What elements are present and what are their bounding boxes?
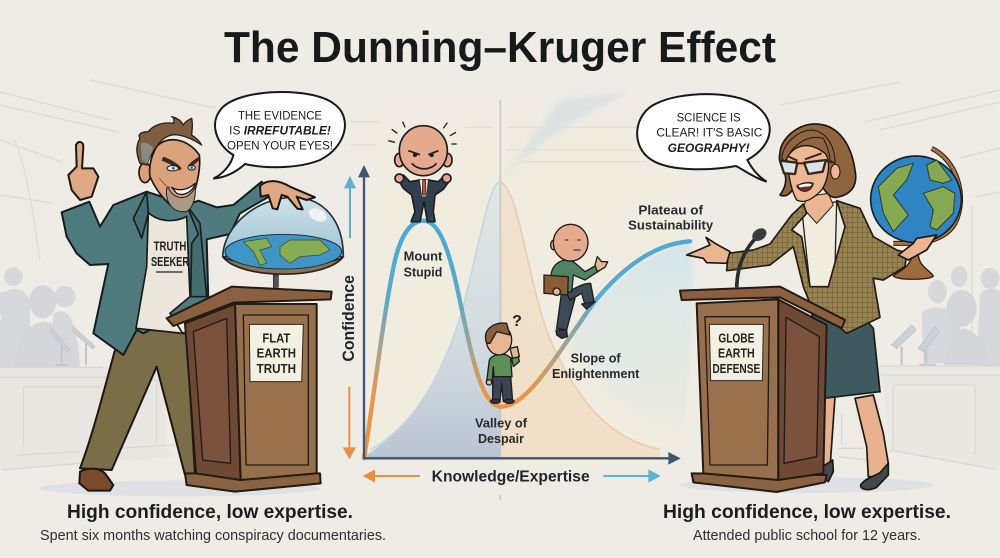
title: The Dunning–Kruger Effect (224, 23, 776, 72)
stage background lines (0, 80, 1000, 380)
t-shirt with slogan: SEEKER (151, 254, 189, 269)
label: Mount Stupid (404, 250, 443, 279)
t-shirt with slogan: TRUTH (154, 239, 186, 254)
speech bubble left: OPEN YOUR EYES! (227, 138, 333, 152)
jacket lapels (133, 192, 207, 297)
label: Slope of Enlightenment: Enlightenment (552, 367, 640, 381)
left scene: truth seeker at lectern (0, 92, 345, 496)
left caption: Spent six months watching conspiracy documentaries. (40, 527, 386, 544)
x axis label: Knowledge/Expertise (432, 469, 590, 486)
y axis label: Confidence (339, 275, 358, 362)
woman's open left hand (687, 237, 730, 263)
audience microphones right (892, 325, 939, 365)
speech bubble left (213, 92, 345, 179)
chart background wash (350, 93, 693, 500)
lectern sign: globe earth defense: GLOBE (718, 330, 754, 345)
character on Mount Stupid (388, 122, 457, 222)
lectern sign: flat earth truth: FLAT (262, 330, 290, 345)
t-shirt with slogan (136, 213, 190, 333)
label: Valley of Despair (475, 416, 528, 446)
flat earth dome (223, 197, 343, 274)
audience microphones left (50, 327, 95, 365)
woman's hand holding globe (898, 235, 937, 260)
x axis direction arrows (363, 469, 661, 483)
speech bubble left: THE EVIDENCE (238, 108, 322, 122)
lectern sign: flat earth truth: EARTH (257, 346, 296, 361)
dome stand (273, 275, 278, 287)
woman's head and hair (779, 124, 856, 201)
woman's neck (803, 193, 833, 223)
right caption: Attended public school for 12 years. (693, 527, 921, 544)
speech bubble right: GEOGRAPHY! (668, 141, 750, 155)
label: Slope of Enlightenment: Slope of (571, 351, 621, 365)
speech bubble right: SCIENCE IS (677, 110, 741, 124)
man's head and face (137, 117, 202, 212)
lectern sign: globe earth defense: EARTH (718, 346, 755, 361)
label: Valley of Despair: Despair (478, 432, 524, 446)
lectern sign: globe earth defense (709, 324, 763, 381)
man's raised pointing hand (68, 142, 98, 200)
audience bench right (838, 366, 1000, 471)
audience silhouettes left (0, 267, 80, 367)
right scene: globe earth defender at lectern (637, 94, 1000, 493)
man's shoe (79, 469, 113, 491)
speech bubble right (637, 94, 770, 182)
axes (358, 165, 681, 465)
lectern sign: flat earth truth: TRUTH (257, 361, 296, 376)
man's hand on dome (260, 181, 315, 209)
y axis direction arrows (343, 176, 356, 459)
confidence curve (364, 221, 690, 458)
label: Plateau of Sustainability (628, 203, 713, 233)
left caption: High confidence, low expertise. (67, 502, 353, 523)
lectern sign: flat earth truth (249, 324, 303, 382)
floor shadow right (680, 477, 933, 493)
audience bench left (0, 367, 175, 470)
woman's plaid blazer (727, 201, 907, 333)
lectern right (680, 287, 845, 492)
character in the Valley of Despair: ? (512, 313, 522, 330)
lectern left (167, 287, 332, 492)
right caption: High confidence, low expertise. (663, 502, 951, 523)
character climbing the Slope of Enlightenment (544, 224, 608, 338)
label: Plateau of Sustainability: Sustainability (628, 219, 713, 233)
audience silhouettes right (922, 266, 1000, 367)
woman's blouse (802, 202, 837, 288)
character in the Valley of Despair (485, 313, 522, 403)
label: Mount Stupid: Stupid (404, 265, 442, 279)
lectern microphone (737, 226, 769, 287)
center chart: Dunning-Kruger curve (339, 93, 713, 500)
label: Slope of Enlightenment (552, 351, 640, 381)
right caption (663, 502, 951, 544)
speech bubble left: IS IRREFUTABLE! (229, 123, 331, 137)
man's jacket (62, 182, 272, 355)
woman's legs (819, 395, 888, 477)
label: Mount Stupid: Mount (404, 250, 443, 264)
lectern sign: globe earth defense: DEFENSE (712, 361, 760, 376)
label: Valley of Despair: Valley of (475, 416, 528, 430)
woman's skirt (808, 287, 880, 398)
label: Plateau of Sustainability: Plateau of (638, 203, 704, 217)
globe on stand (871, 148, 961, 279)
floor shadow (40, 480, 320, 496)
speech bubble right: CLEAR! IT'S BASIC (656, 126, 762, 140)
man's trousers (80, 328, 195, 475)
woman's shoes (819, 460, 888, 490)
left caption (40, 502, 386, 544)
